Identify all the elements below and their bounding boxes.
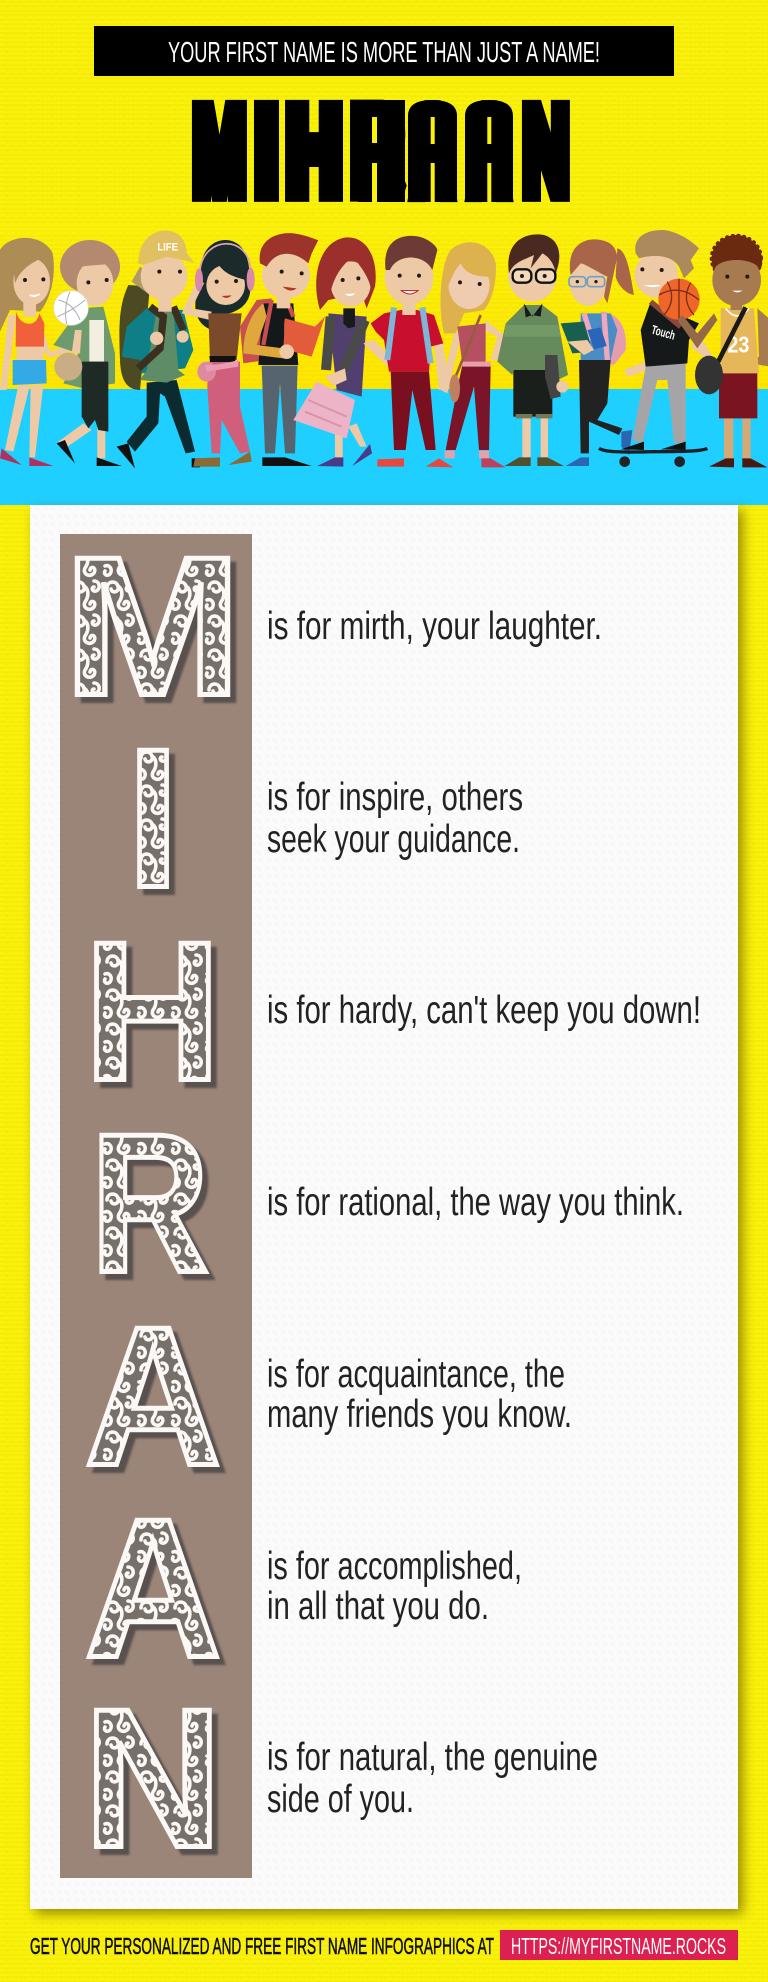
person: blonde girl <box>441 242 506 467</box>
title: name: A <box>413 86 452 217</box>
person: girl with ponytail and tablet <box>561 239 634 466</box>
white content card <box>30 505 738 1909</box>
person: boy with afro and yellow tank top: 23 <box>727 332 749 358</box>
person: girl with orange top <box>0 238 80 466</box>
text: N meaning: is for natural, the genuine <box>267 1736 598 1779</box>
person: girl with red hair and pink bag <box>293 237 376 467</box>
text: A meaning <box>267 1353 572 1436</box>
illustration: group of young people, left half <box>0 231 376 468</box>
decorative letter A: A <box>84 1478 222 1698</box>
person: boy with afro and yellow tank top <box>677 235 768 467</box>
title: name: R <box>352 85 403 217</box>
text: A meaning: is for acquaintance, the <box>267 1353 565 1396</box>
illustration: group of young people, right half <box>363 230 768 467</box>
title: name: A <box>470 86 508 217</box>
title: name: H <box>287 86 341 218</box>
decorative letter A: A <box>84 1286 222 1506</box>
person: boy with black glasses <box>497 234 568 466</box>
text: A meaning <box>267 1545 522 1628</box>
decorative letter H: H <box>84 900 221 1122</box>
text: N meaning: side of you. <box>267 1778 414 1821</box>
text: I meaning: is for inspire, others <box>267 776 523 819</box>
header banner <box>94 26 674 76</box>
title: name <box>193 85 569 218</box>
person: boy with red book <box>240 233 325 466</box>
text: A meaning: many friends you know. <box>267 1393 572 1436</box>
panel: brown letter column <box>60 534 252 1878</box>
decorative letter R: R <box>90 1092 209 1314</box>
text: N meaning <box>267 1736 598 1821</box>
text: M meaning: is for mirth, your laughter. <box>267 605 602 648</box>
decorative letter I: I <box>127 708 179 928</box>
text: I meaning: seek your guidance. <box>267 818 520 861</box>
person: boy with cap and backpack: LIFE <box>157 242 178 254</box>
person: boy with cap and backpack <box>117 231 200 468</box>
title: name: N <box>523 85 569 218</box>
blue floor band <box>0 389 768 505</box>
person: boy with red tee and blue straps <box>363 236 453 467</box>
person: skater boy with basketball <box>599 230 712 467</box>
decorative letter N: N <box>84 1668 222 1888</box>
text: A meaning: in all that you do. <box>267 1585 489 1628</box>
title: name: M <box>193 86 246 218</box>
person: girl with pink headphones <box>182 240 255 467</box>
text: A meaning: is for accomplished, <box>267 1545 522 1588</box>
person: skater boy with basketball: Touch <box>650 323 677 343</box>
text: I meaning <box>267 776 523 861</box>
title: name: I <box>256 85 277 218</box>
person: girl with green jacket and volleyball <box>53 240 122 466</box>
decorative letter M: M <box>63 516 242 736</box>
